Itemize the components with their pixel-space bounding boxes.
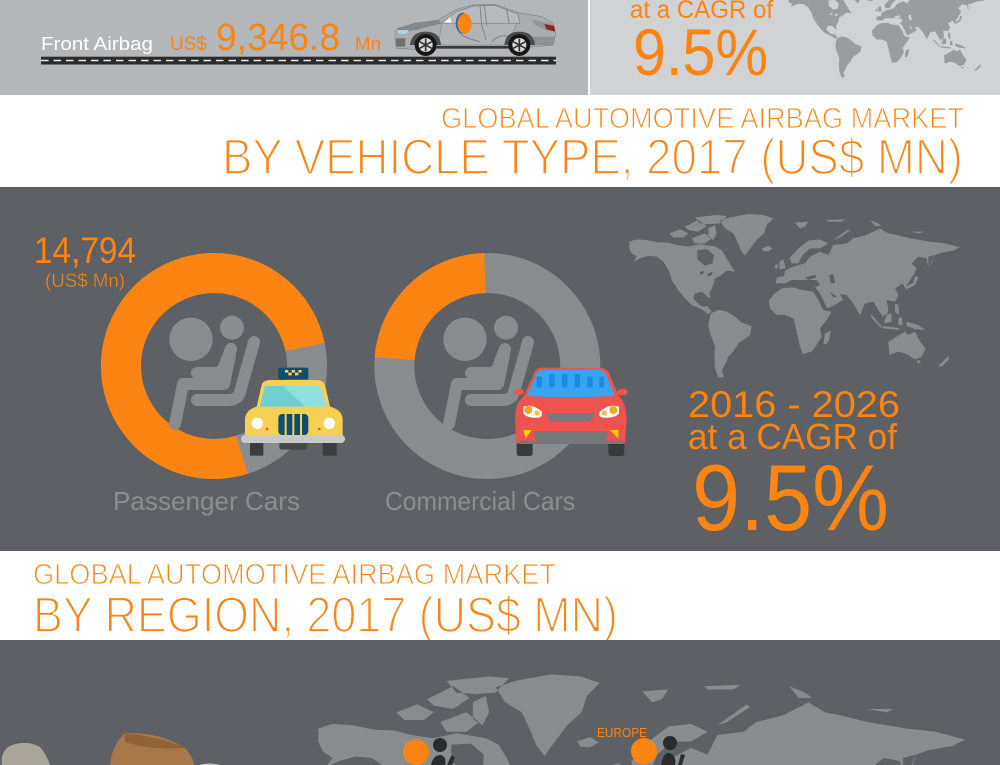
label: Passenger Cars: Passenger Cars [113,486,300,516]
marker: north america [403,738,455,765]
label: Front Airbag: Front Airbag [41,34,153,54]
illustration: driver hair [110,733,194,765]
world map [788,0,987,77]
illustration: airbag [2,743,50,765]
heading: by region [33,559,618,643]
illustration: seat top [199,764,220,765]
marker: europe [631,736,685,765]
forecast period: 2016 - 2026 [688,384,900,425]
donut: passenger cars [121,273,307,459]
passenger unit: (US$ Mn) [45,271,125,292]
CAGR value: 9.5% [633,15,768,89]
label: Europe: EUROPE [597,725,647,740]
world map [318,674,965,765]
heading: by region: GLOBAL AUTOMOTIVE AIRBAG MARKET [33,559,556,591]
heading: by vehicle type: GLOBAL AUTOMOTIVE AIRBAG MARKET [441,103,964,135]
panel: CAGR band [590,0,1000,95]
heading: by vehicle type [222,103,964,185]
panel: by region [0,640,1000,765]
panel: vehicle type [0,187,1000,551]
value: front airbag: 9,346.8 [216,17,340,59]
icon: red car [514,368,628,456]
road [41,57,556,64]
world map [629,214,960,377]
label: Commercial Cars: Commercial Cars [385,486,575,516]
CAGR value: 9.5% [692,445,889,550]
CAGR label: at a CAGR of [688,416,898,457]
icon: seated passenger with airbag [169,316,254,424]
passenger value: 14,794 [34,230,136,271]
icon: seated passenger with airbag [443,316,528,424]
icon: car with airbag [395,4,556,56]
unit: US$: US$ [170,34,207,55]
donut: commercial cars [394,273,580,459]
panel: front airbag band [0,0,588,95]
heading: by region: BY REGION, 2017 (US$ MN) [33,587,618,643]
icon: taxi [241,368,345,456]
unit: Mn: Mn [355,34,381,54]
